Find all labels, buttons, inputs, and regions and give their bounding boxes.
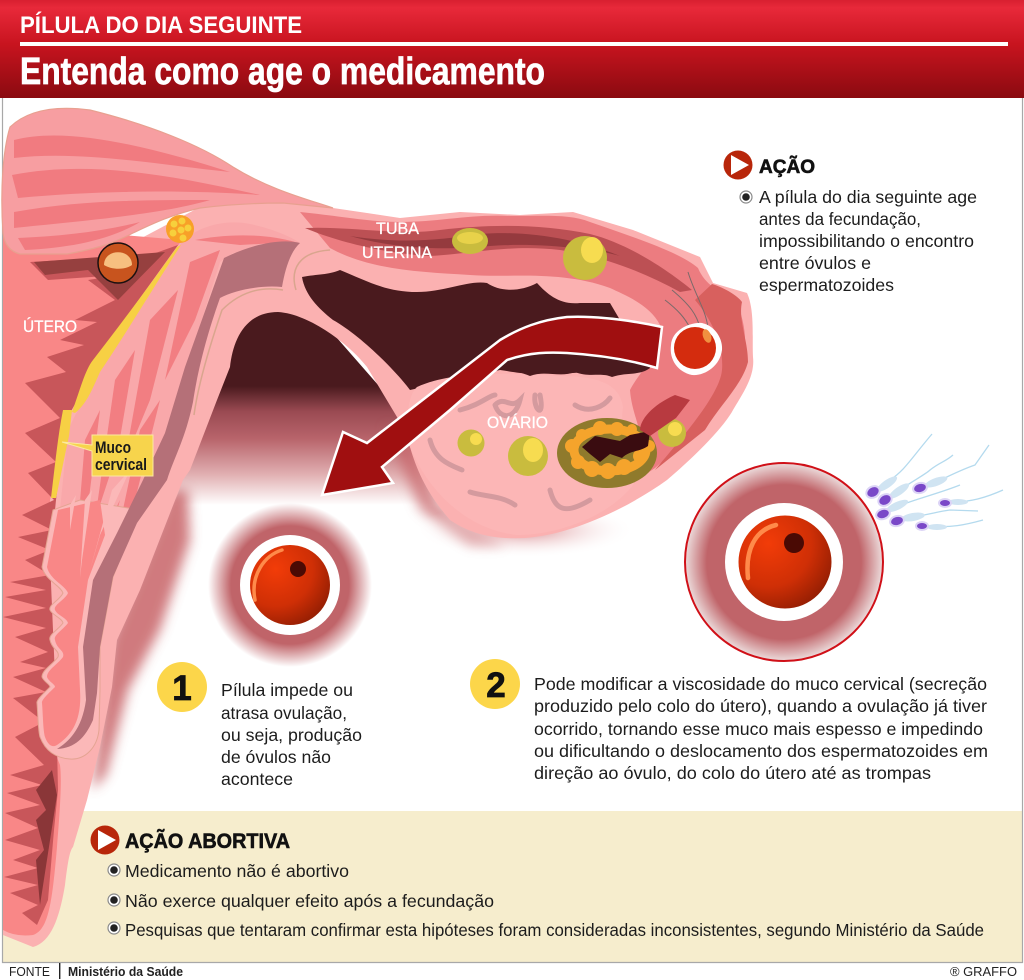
- bullet list: [108, 861, 984, 940]
- text block: step 2: ocorrido, tornando esse muco mais espesso e impedindo: [534, 719, 983, 739]
- cervix capsule: [37, 500, 140, 759]
- diagram: egg without ovulation: [208, 503, 372, 667]
- cervix pale streaks: [70, 470, 130, 578]
- badge 2: 2: [486, 666, 506, 705]
- follicle: [458, 430, 484, 456]
- text block: step 1: [221, 680, 362, 789]
- section: ação abortiva: [90, 826, 984, 940]
- endometrium deep shade: [34, 252, 165, 300]
- icon: play: [90, 826, 120, 854]
- callout: muco cervical: cervical: [95, 456, 147, 474]
- badge 2: [470, 659, 520, 709]
- text block: step 2: produzido pelo colo do útero), quando a ovulação já tiver: [534, 696, 987, 716]
- dark rupture: [640, 395, 690, 436]
- text block: [759, 187, 977, 295]
- ovary folds: [430, 395, 610, 509]
- text block: step 1: de óvulos não: [221, 747, 331, 767]
- mucus: [51, 245, 181, 498]
- ovary shadow: [415, 502, 635, 558]
- title: Entenda como age o medicamento: [20, 51, 545, 93]
- follicle in tube: [563, 236, 607, 280]
- endometrium dark spikes: [3, 245, 178, 925]
- text block: antes da fecundação,: [759, 209, 921, 229]
- wall shadow: [92, 490, 190, 790]
- fundus fold: [294, 250, 330, 290]
- callout: muco cervical: [62, 435, 153, 476]
- label: tuba uterina: TUBA: [376, 219, 420, 238]
- bullet list: Pesquisas que tentaram confirmar esta hipóteses foram consideradas inconsistentes, segundo Ministério da Saúde: [125, 920, 984, 940]
- ovulated egg: [671, 323, 722, 375]
- panel: beige band: [3, 811, 1022, 962]
- badge 1: 1: [172, 669, 192, 708]
- uterus body: [3, 225, 182, 935]
- text block: step 1: Pílula impede ou: [221, 680, 353, 700]
- blastocyst: [98, 243, 138, 283]
- muscle band: [60, 222, 300, 590]
- inner wall line: [194, 289, 283, 415]
- outer wall silhouette: [3, 200, 753, 947]
- label: ovario: OVÁRIO: [487, 413, 548, 432]
- text block: step 2: ou dificultando o deslocamento dos espermatozoides em: [534, 741, 988, 761]
- morula: [166, 215, 194, 243]
- corpus luteum: [557, 418, 657, 488]
- heading: ação: AÇÃO: [759, 156, 815, 178]
- label: uterina: UTERINA: [362, 243, 433, 262]
- header: [0, 0, 1024, 98]
- ovary lower-left shadow: [385, 425, 505, 545]
- icon: play: [724, 150, 752, 180]
- fan stripes: [12, 135, 260, 250]
- bullet list: Não exerce qualquer efeito após a fecundação: [125, 891, 494, 911]
- deep shade lower: [36, 770, 57, 905]
- icon: bullet: [740, 191, 752, 203]
- step 2: [470, 659, 988, 783]
- fallopian lumen: [302, 270, 650, 390]
- text block: step 1: atrasa ovulação,: [221, 703, 347, 723]
- heading: ação abortiva: AÇÃO ABORTIVA: [125, 830, 290, 853]
- follicle: [508, 436, 548, 476]
- text block: step 2: [534, 674, 988, 783]
- lumen scallops below arrow: [505, 356, 650, 377]
- footer: FONTE: [9, 964, 50, 979]
- heading: kicker: PÍLULA DO DIA SEGUINTE: [20, 11, 302, 39]
- follicle near ovary: [658, 419, 686, 447]
- cervix interior: [42, 500, 105, 746]
- text block: step 2: Pode modificar a viscosidade do muco cervical (secreção: [534, 674, 987, 694]
- text block: A pílula do dia seguinte age: [759, 187, 977, 207]
- text block: espermatozoides: [759, 275, 894, 295]
- fimbriae hairs: [665, 272, 708, 328]
- step 1: [157, 662, 362, 789]
- section: ação: [724, 150, 977, 295]
- text block: entre óvulos e: [759, 253, 871, 273]
- tube right rim: [655, 284, 748, 470]
- icon: sperm group: [864, 434, 1003, 530]
- tube dark streaks: [305, 226, 692, 292]
- bullet list: Medicamento não é abortivo: [125, 861, 349, 881]
- muscle stripes: [72, 235, 295, 620]
- label: utero: ÚTERO: [23, 317, 77, 336]
- ovary: [408, 374, 657, 535]
- flattened follicle in tube: [452, 228, 488, 254]
- footer: ® GRAFFO: [950, 965, 1017, 979]
- text block: step 1: ou seja, produção: [221, 725, 362, 745]
- badge 1: [157, 662, 207, 712]
- anatomy: reproductive tract: [2, 108, 753, 947]
- text block: impossibilitando o encontro: [759, 231, 974, 251]
- text block: step 1: acontece: [221, 769, 293, 789]
- uterine cavity with fade: [175, 309, 470, 505]
- mauve band: [57, 241, 300, 749]
- footer: [9, 963, 1017, 979]
- callout: muco cervical: Muco: [95, 439, 131, 457]
- diagram: egg with barrier: [685, 463, 883, 661]
- tube muscle layer: [300, 212, 745, 478]
- tube darkest streak: [350, 233, 620, 256]
- text block: step 2: direção ao óvulo, do colo do útero até as trompas: [534, 763, 931, 783]
- fan fold: [2, 108, 333, 254]
- arrow: [322, 317, 662, 495]
- footer: Ministério da Saúde: [68, 964, 183, 979]
